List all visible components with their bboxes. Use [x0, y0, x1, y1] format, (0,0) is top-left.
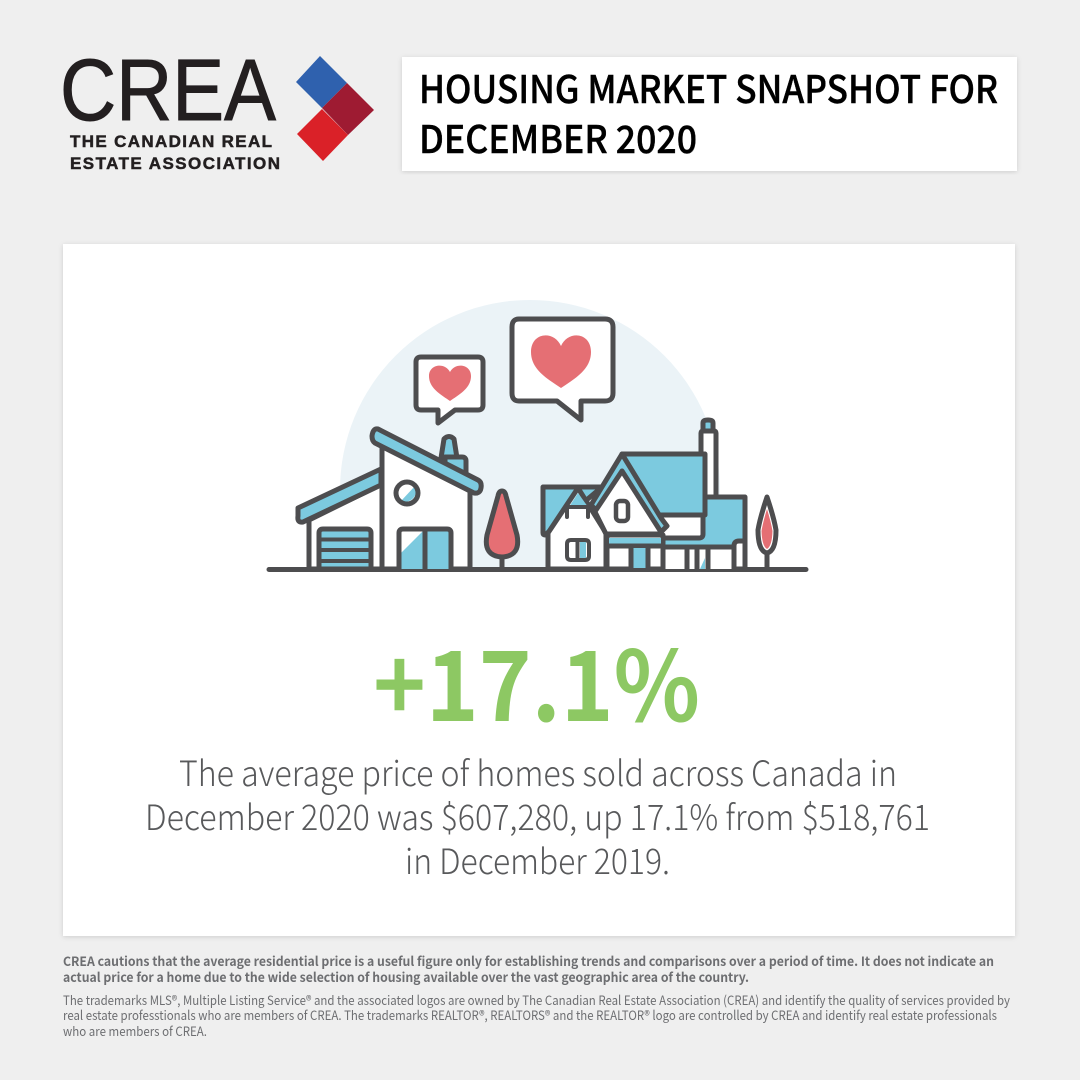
garage door	[319, 529, 371, 569]
caution note	[63, 951, 994, 986]
trademark note: who are members of CREA.	[63, 1021, 207, 1040]
right house	[543, 420, 745, 569]
illustration: houses with heart speech bubbles	[269, 300, 806, 570]
logo tagline: THE CANADIAN REAL	[70, 132, 272, 151]
logo wordmark: CREA	[60, 42, 276, 139]
pale background circle	[340, 300, 720, 569]
description text: in December 2019.	[405, 834, 670, 885]
front door	[399, 529, 451, 569]
description text	[145, 746, 930, 885]
big percentage figure: +17.1%	[373, 608, 700, 749]
logo tagline	[70, 132, 280, 173]
small tree	[758, 497, 776, 569]
title: HOUSING MARKET SNAPSHOT FOR	[419, 59, 998, 114]
title box	[402, 57, 1017, 171]
trademark note: real estate professtionals who are members of CREA. The trademarks REALTOR®, REALTORS® and the REALTOR® logo are controlled by CREA and identify real estate professionals	[63, 1005, 997, 1024]
large speech bubble with heart	[512, 319, 613, 420]
title	[419, 59, 998, 164]
caution note: actual price for a home due to the wide selection of housing available over the vast geographic area of the country.	[63, 967, 749, 986]
logo diamonds	[296, 56, 374, 161]
round window	[396, 482, 418, 504]
title: DECEMBER 2020	[419, 109, 697, 164]
main panel	[63, 244, 1015, 936]
logo: CREA	[60, 42, 374, 173]
caution note: CREA cautions that the average residential price is a useful figure only for establishing trends and comparisons over a period of time. It does not indicate an	[63, 951, 994, 970]
left house	[298, 429, 481, 569]
trademark note	[63, 990, 1010, 1040]
small speech bubble with heart	[416, 357, 483, 423]
description text: December 2020 was $607,280, up 17.1% from $518,761	[145, 790, 930, 841]
small house window	[567, 540, 589, 560]
tree	[486, 491, 518, 569]
ground line	[269, 567, 806, 572]
logo tagline: ESTATE ASSOCIATION	[70, 154, 280, 173]
description text: The average price of homes sold across Canada in	[179, 746, 897, 797]
